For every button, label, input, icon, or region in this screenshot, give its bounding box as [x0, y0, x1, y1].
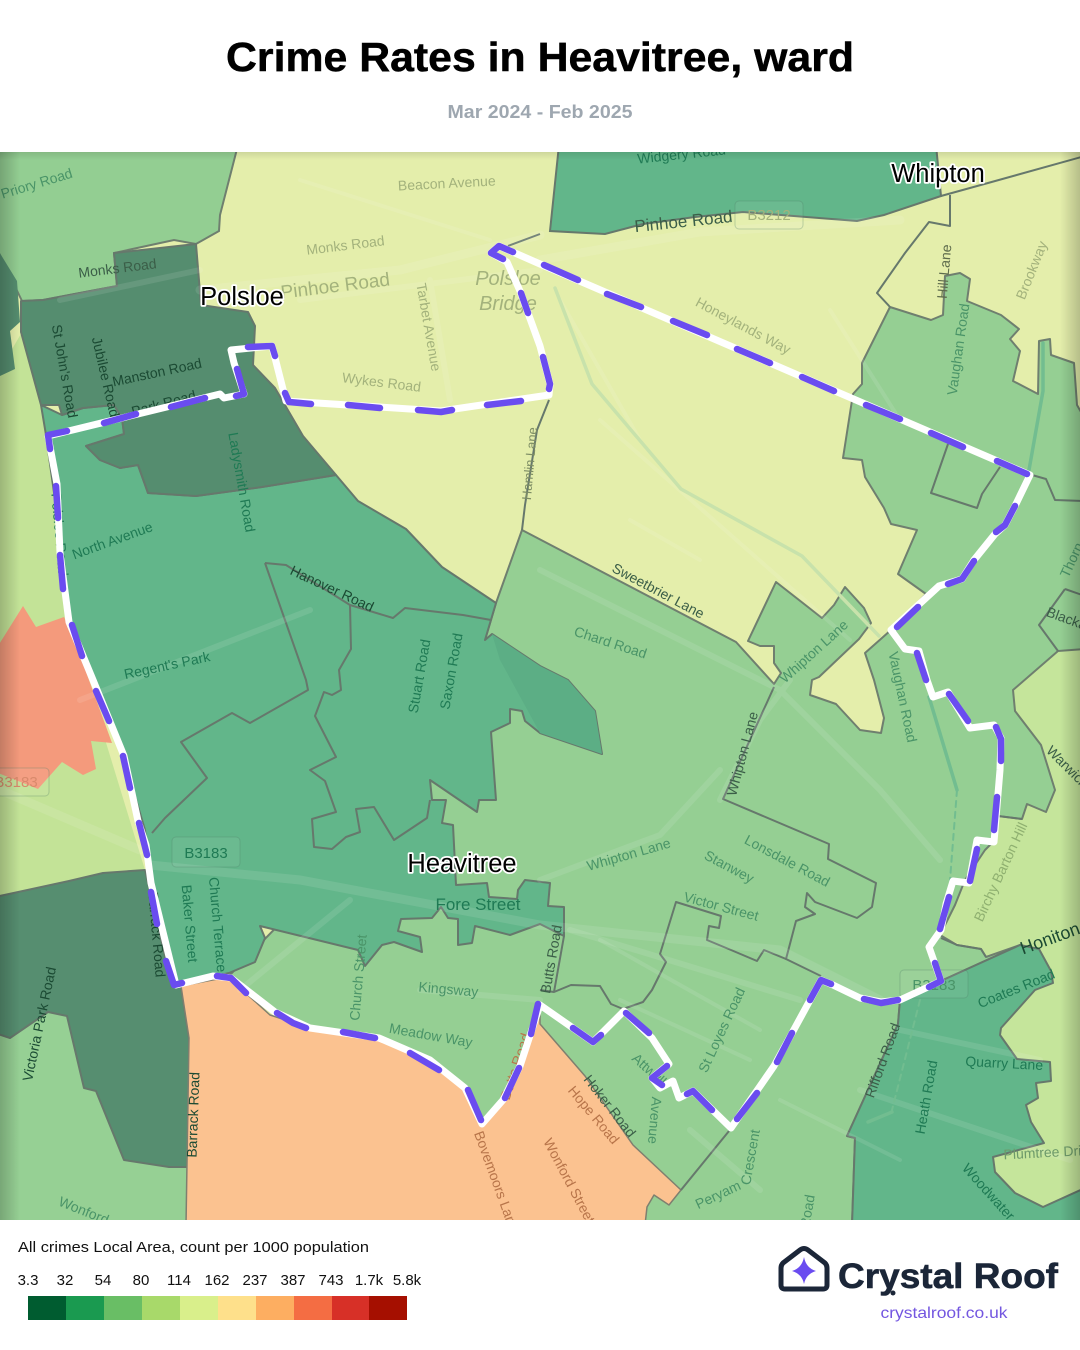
- mid green area: Newtown and Heavitree west: [41, 405, 602, 985]
- legend title: All crimes Local Area, count per 1000 population: [18, 1239, 369, 1256]
- orange area: Wonford: [181, 977, 681, 1225]
- legend scale: 80: [133, 1272, 149, 1289]
- slightly darker green blob: [492, 634, 602, 754]
- place labels: [200, 160, 985, 878]
- logo wordmark: Crystal Roof: [838, 1257, 1058, 1296]
- road labels: Peryam: [693, 1177, 743, 1212]
- road labels: Victor Street: [682, 889, 761, 924]
- road labels: B3183: [912, 977, 956, 994]
- road labels: Kingsway: [418, 978, 479, 1000]
- road labels: Wykes Road: [341, 369, 422, 395]
- legend scale: 5.8k: [393, 1272, 422, 1289]
- road labels: Avenue: [645, 1096, 665, 1145]
- road labels: Vaughan Road: [885, 650, 920, 744]
- lime area east of ward: [900, 640, 1080, 1225]
- road labels: Quarry Lane: [965, 1053, 1044, 1073]
- road labels: Church Terrace: [206, 876, 230, 973]
- road labels: North Avenue: [70, 518, 155, 562]
- road labels: St Loyes Road: [695, 985, 748, 1075]
- light green area south west: [0, 1000, 189, 1225]
- road labels: Pinhoe Road: [280, 269, 391, 304]
- road labels: Polsloe Road: [48, 492, 72, 577]
- legend scale: 32: [57, 1272, 73, 1289]
- legend scale: 114: [167, 1272, 191, 1289]
- road labels: Birchy Barton Hill: [971, 820, 1030, 924]
- road labels: Park Road: [130, 387, 198, 419]
- large light green central area: [228, 273, 1080, 1225]
- road labels: Manston Road: [111, 355, 203, 389]
- map panel: [0, 152, 1080, 1220]
- dark green area: Polsloe west: [21, 244, 336, 496]
- road labels: Stuart Road: [405, 638, 433, 714]
- road labels: Tarbet Avenue: [413, 282, 445, 373]
- road labels: Saxon Road: [437, 632, 466, 710]
- road labels: Hamlin Lane: [519, 427, 540, 501]
- ward boundary: white base line: [48, 246, 1030, 1128]
- road labels: Barrack Road: [184, 1072, 202, 1158]
- road labels: Beacon Avenue: [397, 172, 496, 194]
- road labels: Polsloe: [475, 268, 541, 290]
- legend scale: 3.3: [18, 1272, 38, 1289]
- streams: [555, 288, 1043, 1122]
- road labels: Hope Road: [565, 1083, 623, 1147]
- subtitle: date range: Mar 2024 - Feb 2025: [448, 102, 632, 122]
- road labels: Butts Road: [537, 924, 565, 995]
- legend scale: 162: [204, 1272, 230, 1289]
- icon: Crystal Roof house logo: [778, 1246, 830, 1292]
- mid green area: south east Quarry Lane: [847, 945, 1080, 1225]
- road labels: Brookway: [1012, 239, 1050, 302]
- place labels: Heavitree: [407, 850, 517, 878]
- road labels: B3212: [747, 207, 791, 224]
- roads: [0, 180, 1070, 1190]
- road labels: Heath Road: [912, 1059, 940, 1135]
- salmon high-crime area: [0, 606, 112, 789]
- internal area boundaries: [152, 156, 1080, 1190]
- place labels: Polsloe: [200, 283, 284, 311]
- road labels: Fore Street: [435, 895, 521, 914]
- legend scale: 387: [280, 1272, 306, 1289]
- dark green area: far left edge: [0, 250, 20, 377]
- road labels: Monks Road: [77, 255, 157, 281]
- road labels: Butts Road: [497, 1031, 534, 1102]
- road labels: Attwyll: [629, 1050, 670, 1089]
- road labels: Monks Road: [305, 232, 385, 258]
- road labels: Vaughan Road: [944, 302, 972, 396]
- road labels: Coates Road: [975, 966, 1057, 1011]
- map edge shading: [0, 152, 1080, 1220]
- road labels: Hoker Road: [581, 1072, 639, 1140]
- road labels: Lonsdale Road: [742, 831, 833, 890]
- road labels: Church Street: [346, 934, 370, 1021]
- legend scale: 54: [95, 1272, 111, 1289]
- road labels: Victoria Park Road: [19, 965, 59, 1083]
- road labels: Hill Lane: [934, 244, 954, 299]
- road labels: St John's Road: [49, 323, 81, 419]
- road labels: Baker Street: [179, 884, 201, 963]
- road labels: Whipton Lane: [776, 616, 851, 686]
- road labels: Meadow Way: [388, 1020, 474, 1050]
- road labels: Whipton Lane: [723, 710, 761, 798]
- legend scale: 743: [318, 1272, 344, 1289]
- road labels: Rifford Road: [861, 1021, 903, 1100]
- road labels: Stanwey: [702, 847, 757, 886]
- place labels: Whipton: [891, 160, 985, 188]
- road labels: Whipton Lane: [585, 835, 673, 874]
- road labels: Ladysmith Road: [225, 431, 259, 533]
- road labels: Pinhoe Road: [634, 207, 733, 236]
- map base: low-crime pale yellow area: [0, 152, 1080, 1220]
- road labels: B3183: [184, 845, 228, 862]
- logo url: crystalroof.co.uk: [880, 1305, 1009, 1322]
- road labels: Honeylands Way: [693, 294, 794, 357]
- legend scale: [18, 1272, 422, 1320]
- road labels: Barrack Road: [145, 891, 169, 978]
- lime area west of ward: [0, 332, 145, 900]
- road labels: Chard Road: [572, 623, 649, 662]
- road labels: Crescent: [737, 1128, 763, 1186]
- legend scale: 237: [242, 1272, 268, 1289]
- road labels: Hanover Road: [288, 562, 376, 615]
- road labels: Regent's Park: [123, 648, 212, 682]
- mid green area: north Whipton: [550, 145, 941, 234]
- road labels: Jubilee Road: [89, 335, 123, 418]
- road labels: Sweetbrier Lane: [610, 560, 707, 622]
- ward boundary: purple dashes: [48, 246, 1027, 1120]
- road number shields: [0, 201, 968, 998]
- dark green area: Barrack Road: [0, 870, 189, 1167]
- light green area: Priory Road: [0, 145, 238, 301]
- road labels: Priory Road: [0, 165, 74, 202]
- title: Crime Rates in Heavitree, ward: [226, 34, 854, 80]
- road labels: Bridge: [479, 293, 537, 315]
- legend scale: 1.7k: [355, 1272, 384, 1289]
